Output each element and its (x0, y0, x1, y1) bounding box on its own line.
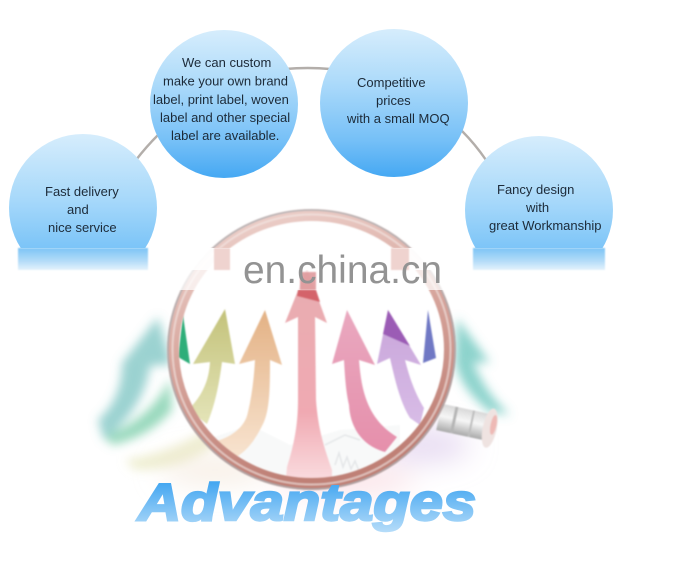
infographic (9, 29, 613, 532)
circle: competitive prices: prices (376, 93, 411, 108)
circle: fancy design (465, 136, 613, 284)
circle: fancy design: great Workmanship (489, 218, 601, 233)
circle: fast delivery (9, 134, 157, 282)
circle: custom labels: label, print label, woven (153, 92, 289, 107)
circle: custom labels (150, 30, 298, 178)
center arrow (285, 268, 332, 490)
circle: custom labels: We can custom (182, 55, 271, 70)
circle: competitive prices: with a small MOQ (346, 111, 450, 126)
arrows (178, 268, 436, 490)
purple arrow (376, 334, 424, 425)
icon: magnifier handle (435, 398, 501, 449)
green arrow (178, 315, 190, 364)
pink arrow (332, 310, 397, 452)
blurred background arrows (98, 317, 510, 470)
circle: competitive prices: Competitive (357, 75, 426, 90)
washed-out watermark band (0, 248, 683, 290)
orange arrow (213, 310, 282, 458)
magnifier lens with arrows (168, 210, 455, 490)
circle: competitive prices (320, 29, 468, 177)
blue arrow (423, 310, 436, 363)
center arrow tip (297, 290, 320, 302)
title: Advantages (136, 474, 476, 532)
watermark text: en.china.cn (243, 249, 442, 292)
connector arcs between circles (136, 68, 486, 160)
purple arrow tip (383, 310, 410, 346)
circle: custom labels: label and other special (160, 110, 290, 125)
circle: fast delivery: Fast delivery (45, 184, 119, 199)
soft shadow glow under the magnifier (160, 427, 470, 494)
circle: fast delivery: nice service (48, 220, 117, 235)
magnifier ring (168, 210, 455, 489)
circle: custom labels: make your own brand (163, 74, 288, 88)
circle: fast delivery: and (67, 202, 89, 217)
circle: fancy design: Fancy design (497, 182, 574, 197)
circle: custom labels: label are available. (171, 128, 279, 143)
circle: fancy design: with (525, 200, 549, 215)
olive arrow (188, 309, 235, 424)
chart texture inside lens (324, 434, 361, 471)
